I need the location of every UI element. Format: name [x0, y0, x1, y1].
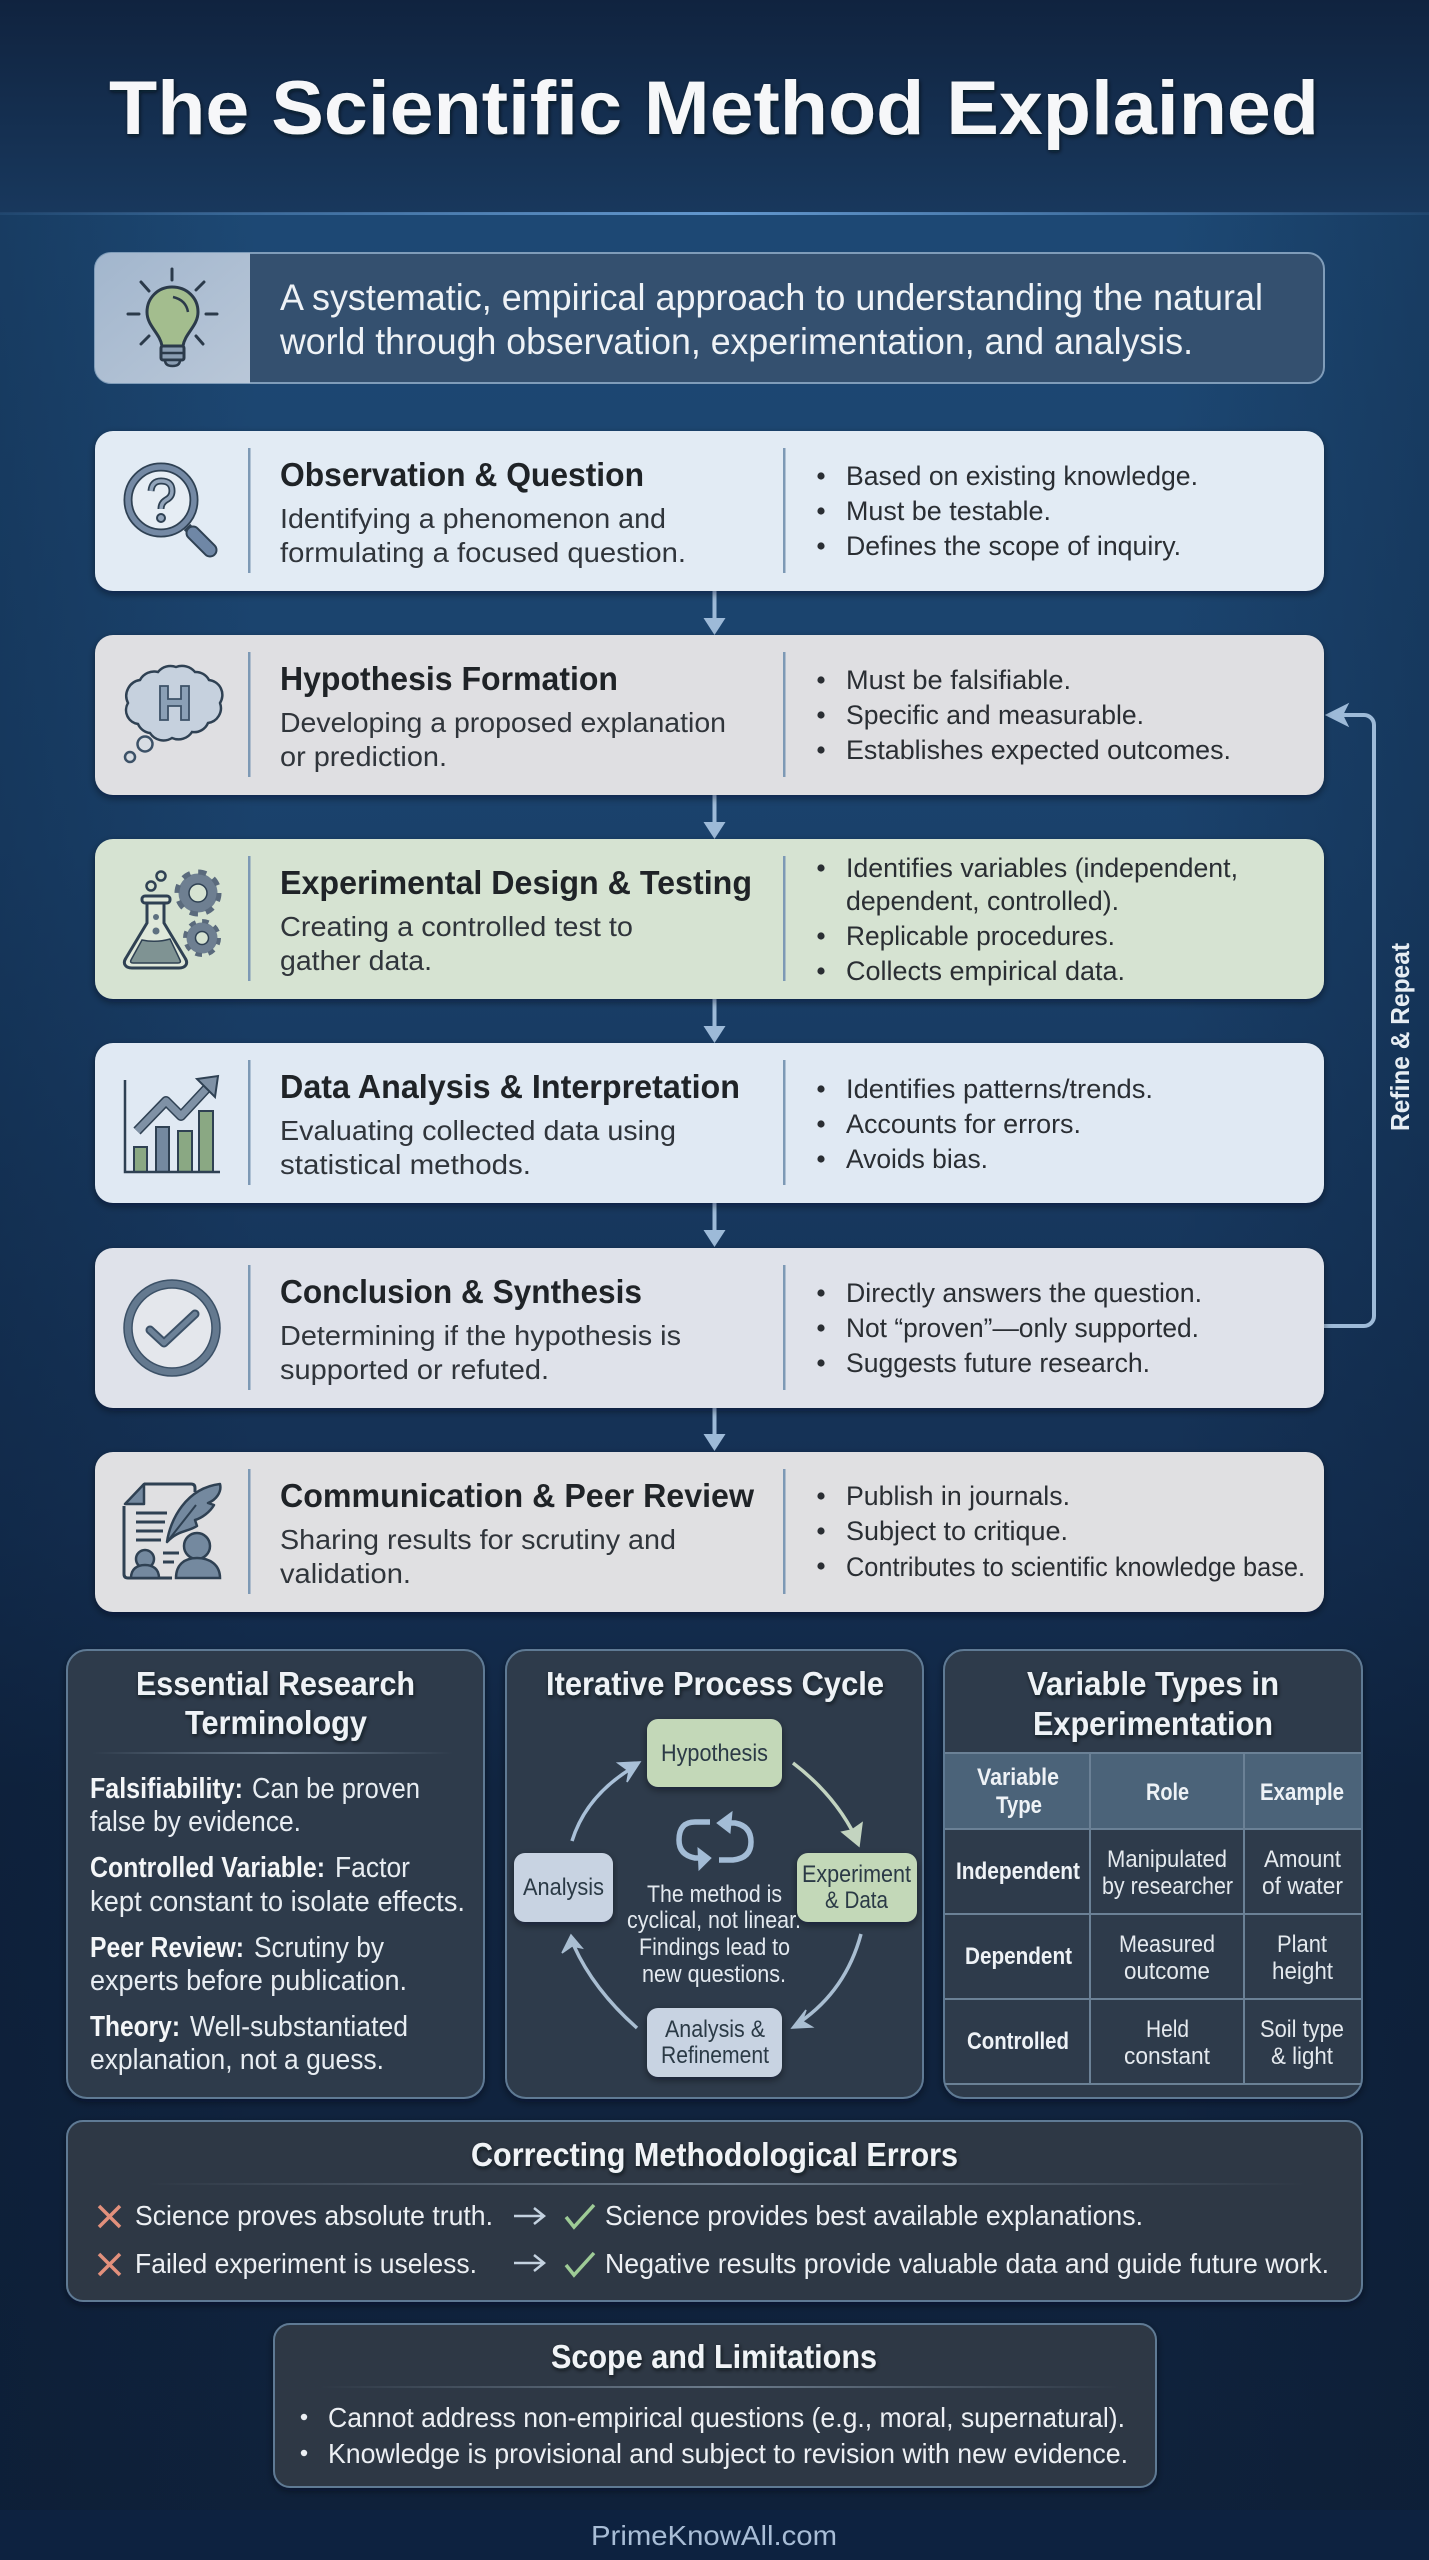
table row: dependent [965, 1931, 1333, 1985]
term: theory: explanation, not a guess. [90, 2044, 384, 2076]
term: controlled variable: kept constant to isolate effects. [90, 1886, 465, 1918]
error row 2: Failed experiment is useless. [135, 2248, 477, 2279]
term: peer review: experts before publication. [90, 1965, 407, 1997]
step description: Creating a controlled test to [280, 911, 633, 942]
node: experiment and data [797, 1853, 917, 1922]
error row 2 [99, 2248, 1329, 2279]
step bullets: Replicable procedures. [846, 921, 1115, 951]
step bullets: Identifies patterns/trends. [846, 1074, 1153, 1104]
step bullets [817, 1278, 1202, 1378]
table row: independent [956, 1846, 1343, 1900]
step description: Sharing results for scrutiny and [280, 1524, 676, 1555]
table row: dependent: Measured [1119, 1931, 1215, 1958]
table header row: Role [1146, 1779, 1189, 1806]
table header row: Type [996, 1792, 1042, 1819]
step description [280, 1320, 681, 1385]
node: analysis: Analysis [523, 1874, 604, 1901]
cycle caption [627, 1881, 801, 1988]
step heading: Conclusion & Synthesis [280, 1273, 642, 1310]
step description: formulating a focused question. [280, 537, 686, 568]
arrow: step 1 to 2 [704, 591, 726, 635]
intro text: world through observation, experimentation, and analysis. [279, 321, 1193, 362]
node: analysis and refinement [647, 2008, 782, 2077]
step heading: Hypothesis Formation [280, 660, 618, 697]
term: peer review: Peer Review: [90, 1932, 244, 1964]
arrow: step 4 to 5 [704, 1203, 726, 1247]
panel heading [1027, 1665, 1279, 1742]
panel heading: Iterative Process Cycle [546, 1665, 884, 1702]
table row: independent: of water [1262, 1873, 1343, 1900]
step description: statistical methods. [280, 1149, 531, 1180]
term: theory: Well-substantiated [190, 2011, 408, 2043]
icon pane: light bulb [95, 253, 250, 383]
arrow: step 3 to 4 [704, 999, 726, 1043]
term: theory [90, 2011, 408, 2076]
icon: flask and gears [124, 872, 219, 968]
step bullets: Based on existing knowledge. [846, 461, 1198, 491]
node: analysis [514, 1853, 613, 1922]
term: peer review [90, 1932, 407, 1997]
step description: supported or refuted. [280, 1354, 549, 1385]
step description: validation. [280, 1558, 411, 1589]
limitations bullets: Cannot address non-empirical questions (e.g., moral, supernatural). [328, 2402, 1125, 2433]
panel: iterative process cycle [506, 1650, 923, 2098]
term: falsifiability: Can be proven [252, 1773, 420, 1805]
panel: step 1 observation and question [95, 431, 1324, 591]
step bullets: Not “proven”—only supported. [846, 1313, 1199, 1343]
panel heading: Variable Types in [1027, 1665, 1279, 1702]
step description: or prediction. [280, 741, 447, 772]
step bullets: Collects empirical data. [846, 956, 1125, 986]
cycle caption: cyclical, not linear. [627, 1907, 801, 1934]
arrow: refine and repeat loop [1324, 705, 1374, 1326]
step description [280, 1115, 676, 1180]
table header row: Example [1260, 1779, 1344, 1806]
table row: controlled: Controlled [967, 2028, 1069, 2055]
panel: scope and limitations [274, 2324, 1156, 2487]
step description [280, 911, 633, 976]
table row: dependent: outcome [1124, 1958, 1210, 1985]
error row 1 [99, 2200, 1143, 2231]
step heading: Communication & Peer Review [280, 1477, 754, 1514]
panel: step 4 data analysis [95, 1043, 1324, 1203]
limitations bullets: Knowledge is provisional and subject to revision with new evidence. [328, 2438, 1128, 2469]
step bullets [817, 1481, 1305, 1582]
step bullets: Accounts for errors. [846, 1109, 1081, 1139]
step bullets [817, 461, 1198, 561]
step heading: Observation & Question [280, 456, 644, 493]
panel heading: Scope and Limitations [551, 2338, 877, 2375]
icon: check circle [124, 1280, 220, 1376]
panel: step 6 communication [95, 1452, 1324, 1612]
icon: cycle arrows [679, 1812, 751, 1870]
title: The Scientific Method Explained [109, 66, 1319, 151]
node: hypothesis [647, 1719, 782, 1787]
step bullets [817, 665, 1231, 765]
table row: dependent: Dependent [965, 1943, 1072, 1970]
term: theory: Theory: [90, 2011, 180, 2043]
panel: essential research terminology [67, 1650, 484, 2098]
footer text: PrimeKnowAll.com [591, 2520, 837, 2551]
step description: Developing a proposed explanation [280, 707, 726, 738]
term: falsifiability: Falsifiability: [90, 1773, 243, 1805]
cycle caption: new questions. [642, 1961, 786, 1988]
step bullets: Contributes to scientific knowledge base. [846, 1552, 1305, 1582]
step bullets: Directly answers the question. [846, 1278, 1202, 1308]
cycle arrows [562, 1762, 862, 2028]
step bullets: Must be falsifiable. [846, 665, 1071, 695]
step bullets: Suggests future research. [846, 1348, 1150, 1378]
step description [280, 707, 726, 772]
panel: correcting methodological errors [67, 2121, 1362, 2301]
panel heading: Experimentation [1033, 1705, 1273, 1742]
node: experiment and data: Experiment [802, 1861, 911, 1888]
term: controlled variable: Controlled Variable: [90, 1852, 325, 1884]
step bullets: Publish in journals. [846, 1481, 1070, 1511]
footer band [0, 2510, 1429, 2560]
table row: independent: Amount [1264, 1846, 1341, 1873]
panel: variable types table [944, 1650, 1362, 2098]
node: hypothesis: Hypothesis [661, 1740, 768, 1767]
label: refine and repeat: Refine & Repeat [1385, 943, 1415, 1131]
step heading: Data Analysis & Interpretation [280, 1068, 740, 1105]
icon: document, quill and reviewers [124, 1484, 220, 1578]
term: falsifiability [90, 1773, 420, 1838]
step heading: Experimental Design & Testing [280, 864, 752, 901]
panel: step 3 experimental design [95, 839, 1324, 999]
panel heading: Essential Research [136, 1665, 415, 1702]
step description: gather data. [280, 945, 432, 976]
error row 1: Science provides best available explanations. [605, 2200, 1143, 2231]
icon: magnifier question [128, 467, 210, 550]
table row: controlled: Held [1146, 2016, 1189, 2043]
step bullets: Subject to critique. [846, 1516, 1068, 1546]
table row: controlled: constant [1124, 2043, 1210, 2070]
step bullets: Establishes expected outcomes. [846, 735, 1231, 765]
step bullets: dependent, controlled). [846, 886, 1119, 916]
node: analysis and refinement: Refinement [661, 2042, 769, 2069]
cycle caption: The method is [647, 1881, 782, 1908]
panel: intro definition [95, 253, 1324, 383]
step bullets: Avoids bias. [846, 1144, 988, 1174]
table row: independent: by researcher [1102, 1873, 1233, 1900]
panel heading: Correcting Methodological Errors [471, 2136, 958, 2173]
icon: bar chart with trend [125, 1076, 220, 1172]
error row 2: Negative results provide valuable data and guide future work. [605, 2248, 1329, 2279]
table grid [945, 1753, 1361, 2084]
table row: controlled: & light [1271, 2043, 1333, 2070]
panel heading [136, 1665, 415, 1741]
term: peer review: Scrutiny by [254, 1932, 384, 1964]
term: falsifiability: false by evidence. [90, 1806, 301, 1838]
table row: dependent: height [1272, 1958, 1333, 1985]
arrow: step 2 to 3 [704, 795, 726, 839]
table row: controlled [967, 2016, 1344, 2070]
panel: step 2 hypothesis formation [95, 635, 1324, 795]
step bullets: Defines the scope of inquiry. [846, 531, 1181, 561]
table header row: Variable [977, 1764, 1059, 1791]
step bullets: Must be testable. [846, 496, 1051, 526]
table row: dependent: Plant [1277, 1931, 1327, 1958]
step description [280, 1524, 676, 1589]
node: experiment and data: & Data [825, 1887, 889, 1914]
step bullets [817, 853, 1238, 986]
term: controlled variable [90, 1852, 465, 1918]
header band [0, 0, 1429, 215]
step description: Evaluating collected data using [280, 1115, 676, 1146]
step description: Determining if the hypothesis is [280, 1320, 681, 1351]
cycle caption: Findings lead to [639, 1934, 790, 1961]
table row: independent: Manipulated [1107, 1846, 1227, 1873]
table header row [977, 1764, 1344, 1819]
step bullets: Identifies variables (independent, [846, 853, 1238, 883]
step description: Identifying a phenomenon and [280, 503, 666, 534]
icon: thought cloud H [125, 666, 222, 762]
step bullets [817, 1074, 1153, 1174]
term: controlled variable: Factor [335, 1852, 410, 1884]
step bullets: Specific and measurable. [846, 700, 1144, 730]
table row: independent: Independent [956, 1858, 1080, 1885]
step description [280, 503, 686, 568]
intro text [279, 277, 1263, 362]
intro text: A systematic, empirical approach to understanding the natural [280, 277, 1263, 318]
panel: step 5 conclusion [95, 1248, 1324, 1408]
node: analysis and refinement: Analysis & [665, 2016, 765, 2043]
panel heading: Terminology [185, 1704, 368, 1741]
arrow: step 5 to 6 [704, 1407, 726, 1451]
error row 1: Science proves absolute truth. [135, 2200, 493, 2231]
limitations bullets [301, 2402, 1128, 2469]
table row: controlled: Soil type [1260, 2016, 1344, 2043]
